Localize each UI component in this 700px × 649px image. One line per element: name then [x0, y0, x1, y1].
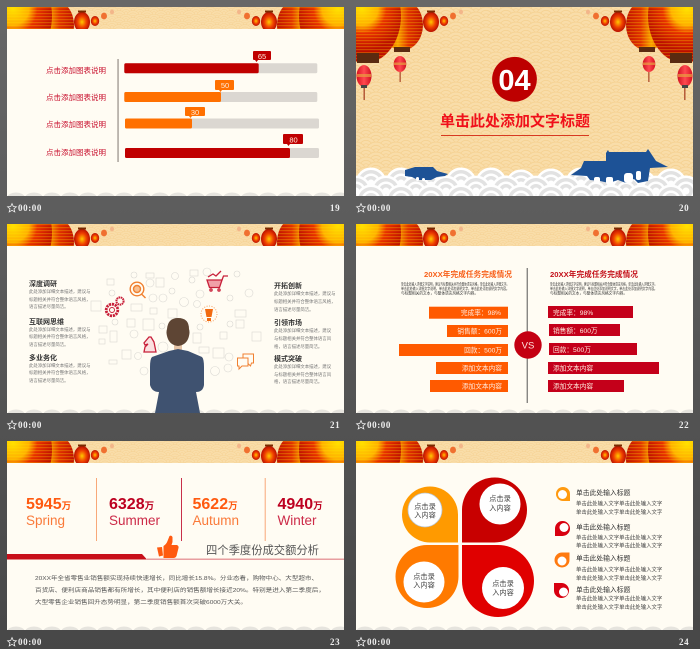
left bars: 完成率：98% — [461, 308, 501, 317]
petal: bottom left: 入内容 — [413, 580, 435, 590]
bar chart labels — [46, 65, 106, 157]
left text column: 标题相关并符合整体语言风格， — [29, 333, 90, 340]
subtitle: 四个季度份成交额分析 — [206, 543, 319, 557]
section divider bar — [7, 554, 344, 560]
panel: slide 24 petal diagram — [329, 403, 700, 636]
left description: 单击此处输入详细文字说明，建议与标题相关并符合整体语言风格，单击此处输入详细文字。 — [401, 282, 509, 286]
left text column: 语言描述尽量简洁。 — [29, 303, 69, 310]
left text column: 此处添加详细文本描述，建议与 — [29, 288, 90, 295]
value tags: 30 — [191, 108, 199, 117]
legend item 3: 单击此处输入标题 — [576, 554, 631, 562]
panel: slide 22 VS comparison — [329, 186, 700, 418]
footer: slide 22 — [357, 420, 689, 430]
left text column: 语言描述尽量简洁。 — [29, 377, 69, 384]
footer: slide 20: 20 — [679, 203, 689, 213]
panel: slide 19 bar chart — [0, 0, 371, 202]
left description — [401, 282, 509, 296]
stat: summer — [109, 496, 161, 528]
right text column — [274, 281, 335, 385]
icon: orange lightbulb — [201, 306, 217, 322]
stat: winter — [278, 496, 323, 528]
right text column: 此处添加详细文本描述，建议 — [274, 363, 332, 370]
right bars — [548, 306, 659, 392]
petal: top left — [402, 486, 458, 542]
right bars: 销售额：600万 — [553, 326, 598, 335]
left text column: 标题相关并符合整体语言风格， — [29, 296, 90, 303]
footer: slide 20: 00:00 — [367, 203, 391, 213]
stat: winter: Winter — [278, 513, 317, 528]
left text column: 深度调研 — [29, 279, 57, 288]
blue roofs — [405, 149, 668, 183]
right bars: 回款：500万 — [553, 345, 591, 354]
left heading: 20XX年完成任务完成情况 — [424, 269, 512, 279]
stat: spring — [26, 496, 71, 528]
right text column: 与标题相关并符合整体语言风 — [274, 371, 332, 378]
right text column: 此处添加详细文本描述，建议 — [274, 327, 332, 334]
VS badge: VS — [522, 340, 534, 352]
left bars: 回款：500万 — [464, 346, 502, 354]
footer: slide 21 — [8, 420, 340, 430]
value tags: 80 — [289, 136, 298, 144]
icon: red shopping cart — [207, 271, 228, 291]
footer: slide 21: 21 — [330, 420, 340, 430]
petal: bottom left — [396, 545, 458, 608]
stat: autumn: 5622万 — [192, 496, 238, 513]
footer: slide 22: 00:00 — [367, 420, 391, 430]
petal: top right — [462, 478, 527, 542]
right description: 与标题相关的文本，与整体语言风格文字内容。 — [550, 290, 627, 296]
section number badge: 04 — [498, 65, 531, 97]
stat: spring: Spring — [26, 513, 65, 528]
legend item 3 — [554, 552, 662, 582]
petal: bottom right: 入内容 — [492, 588, 514, 597]
legend item 1 — [556, 487, 662, 516]
left text column: 互联网思维 — [29, 317, 64, 326]
left text column — [29, 279, 90, 384]
right text column: 语言描述尽量简洁。 — [274, 306, 314, 313]
footer: slide 24 — [357, 637, 689, 647]
icon: orange chat bubbles — [238, 354, 254, 369]
left text column: 此处添加详细文本描述，建议与 — [29, 362, 90, 369]
value tags: 65 — [258, 52, 266, 61]
stat: summer: 6328万 — [109, 496, 154, 513]
lanterns — [356, 7, 693, 100]
right bars: 完成率：98% — [553, 308, 593, 317]
footer: slide 24: 24 — [679, 637, 689, 647]
legend item 2 — [555, 521, 662, 550]
right text column: 引领市场 — [274, 318, 302, 327]
icon: red chess knight — [144, 337, 156, 352]
icon: red gears — [106, 297, 124, 316]
right description: 单击此处输入详细文字说明，单击此处添加说明文字，单击此处添加说明文字内容。 — [550, 286, 657, 291]
bar chart — [124, 51, 319, 158]
icon: thumbs up — [157, 536, 179, 558]
bar chart labels: 点击添加图表说明 — [46, 119, 106, 129]
left text column: 此处添加详细文本描述，建议与 — [29, 326, 90, 333]
section number badge — [492, 57, 537, 102]
right text column: 标题相关并符合整体语言风格， — [274, 298, 335, 305]
right bars: 添加文本内容 — [553, 382, 593, 390]
stat: winter: 4940万 — [278, 496, 323, 513]
right text column: 格，语言描述尽量简洁。 — [274, 343, 322, 350]
petal: top left: 点击录 — [414, 502, 436, 511]
legend item 4: 单击此处输入文字单击此处输入文字 — [576, 594, 662, 602]
legend item 4 — [554, 583, 662, 611]
right text column: 与标题相关并符合整体语言风 — [274, 335, 332, 342]
right text column: 模式突破 — [274, 354, 302, 363]
left bars: 添加文本内容 — [462, 364, 502, 372]
stat: autumn — [192, 496, 239, 528]
right text column: 开拓创新 — [274, 281, 302, 290]
stat: autumn: Autumn — [192, 513, 239, 528]
legend item 2: 单击此处输入文字单击此处输入文字 — [576, 534, 662, 542]
icon: orange magnifier — [130, 282, 146, 298]
petal: top right: 入内容 — [489, 504, 511, 512]
stat: summer: Summer — [109, 513, 161, 528]
panel: slide 21 thinking figure — [0, 186, 371, 418]
section title: 单击此处添加文字标题 — [440, 112, 590, 130]
value tags — [185, 51, 303, 146]
left description: 与标题相关的文本，与整体语言风格文字内容。 — [401, 290, 478, 296]
petal: bottom right — [462, 545, 534, 617]
bar chart labels: 点击添加图表说明 — [46, 92, 106, 102]
value tags: 50 — [221, 81, 229, 90]
petal: top left: 入内容 — [414, 510, 436, 520]
footer: slide 23: 23 — [330, 637, 340, 647]
right text column: 格，语言描述尽量简洁。 — [274, 378, 322, 385]
legend item 3: 单击此处输入文字单击此处输入文字 — [576, 566, 662, 574]
legend item 3: 单击此处输入文字单击此处输入文字 — [576, 574, 662, 582]
left text column: 语言描述尽量简洁。 — [29, 341, 69, 348]
petal: top right: 点击录 — [489, 494, 511, 503]
footer: slide 19: 19 — [330, 203, 340, 213]
left bars: 添加文本内容 — [462, 382, 502, 390]
footer: slide 24: 00:00 — [367, 637, 391, 647]
left text column: 标题相关并符合整体语言风格， — [29, 369, 90, 376]
wave drips over roofs — [416, 171, 641, 184]
body paragraph: 20XX年全省零售业销售额实现持续快速增长，同比增长15.8%。分业态看，购物中心、大型超市、 — [35, 574, 318, 582]
VS badge — [514, 331, 542, 359]
legend item 1: 单击此处输入标题 — [576, 488, 631, 497]
footer: slide 23 — [8, 637, 340, 647]
body paragraph — [35, 574, 325, 606]
petal: bottom right: 点击录 — [492, 579, 514, 588]
legend item 2: 单击此处输入文字单击此处输入文字 — [576, 542, 662, 550]
icon cloud — [91, 268, 261, 376]
bar chart labels: 点击添加图表说明 — [46, 65, 106, 75]
body paragraph: 百货店、便利店商品销售都有所增长，其中便利店的销售额增长接近20%。特别是进入第二季度后， — [35, 586, 325, 594]
footer: slide 23: 00:00 — [18, 637, 42, 647]
footer: slide 21: 00:00 — [18, 420, 42, 430]
bar chart labels: 点击添加图表说明 — [46, 147, 106, 157]
left text column: 多业务化 — [29, 353, 57, 362]
left bars: 销售额：600万 — [457, 326, 502, 336]
legend item 2: 单击此处输入标题 — [576, 522, 631, 532]
right bars: 添加文本内容 — [553, 364, 593, 372]
petal: bottom left: 点击录 — [413, 572, 435, 581]
panel: slide 20 section cover — [356, 7, 693, 196]
body paragraph: 大型零售企业销售回升态势明显，第二季度销售额首次突破6000万大关。 — [35, 598, 247, 606]
stat: spring: 5945万 — [26, 496, 71, 513]
waves — [356, 168, 693, 196]
footer: slide 19 — [8, 203, 340, 213]
legend item 1: 单击此处输入文字单击此处输入文字 — [576, 508, 662, 516]
footer: slide 19: 00:00 — [18, 203, 42, 213]
left bars — [399, 307, 508, 392]
panel: slide 23 seasons — [0, 403, 371, 636]
footer: slide 20 — [357, 203, 689, 213]
figure: man from behind — [150, 318, 204, 413]
footer: slide 22: 22 — [679, 420, 689, 430]
legend item 1: 单击此处输入文字单击此处输入文字 — [576, 500, 662, 508]
right heading: 20XX年完成任务完成情况 — [550, 269, 638, 279]
legend item 4: 单击此处输入文字单击此处输入文字 — [576, 603, 662, 611]
right text column: 此处添加详细文本描述，建议与 — [274, 290, 335, 297]
legend item 4: 单击此处输入标题 — [576, 585, 631, 594]
left description: 单击此处输入详细文字说明，单击此处添加说明文字，单击此处添加说明文字内容。 — [401, 286, 509, 291]
right description — [550, 282, 657, 296]
